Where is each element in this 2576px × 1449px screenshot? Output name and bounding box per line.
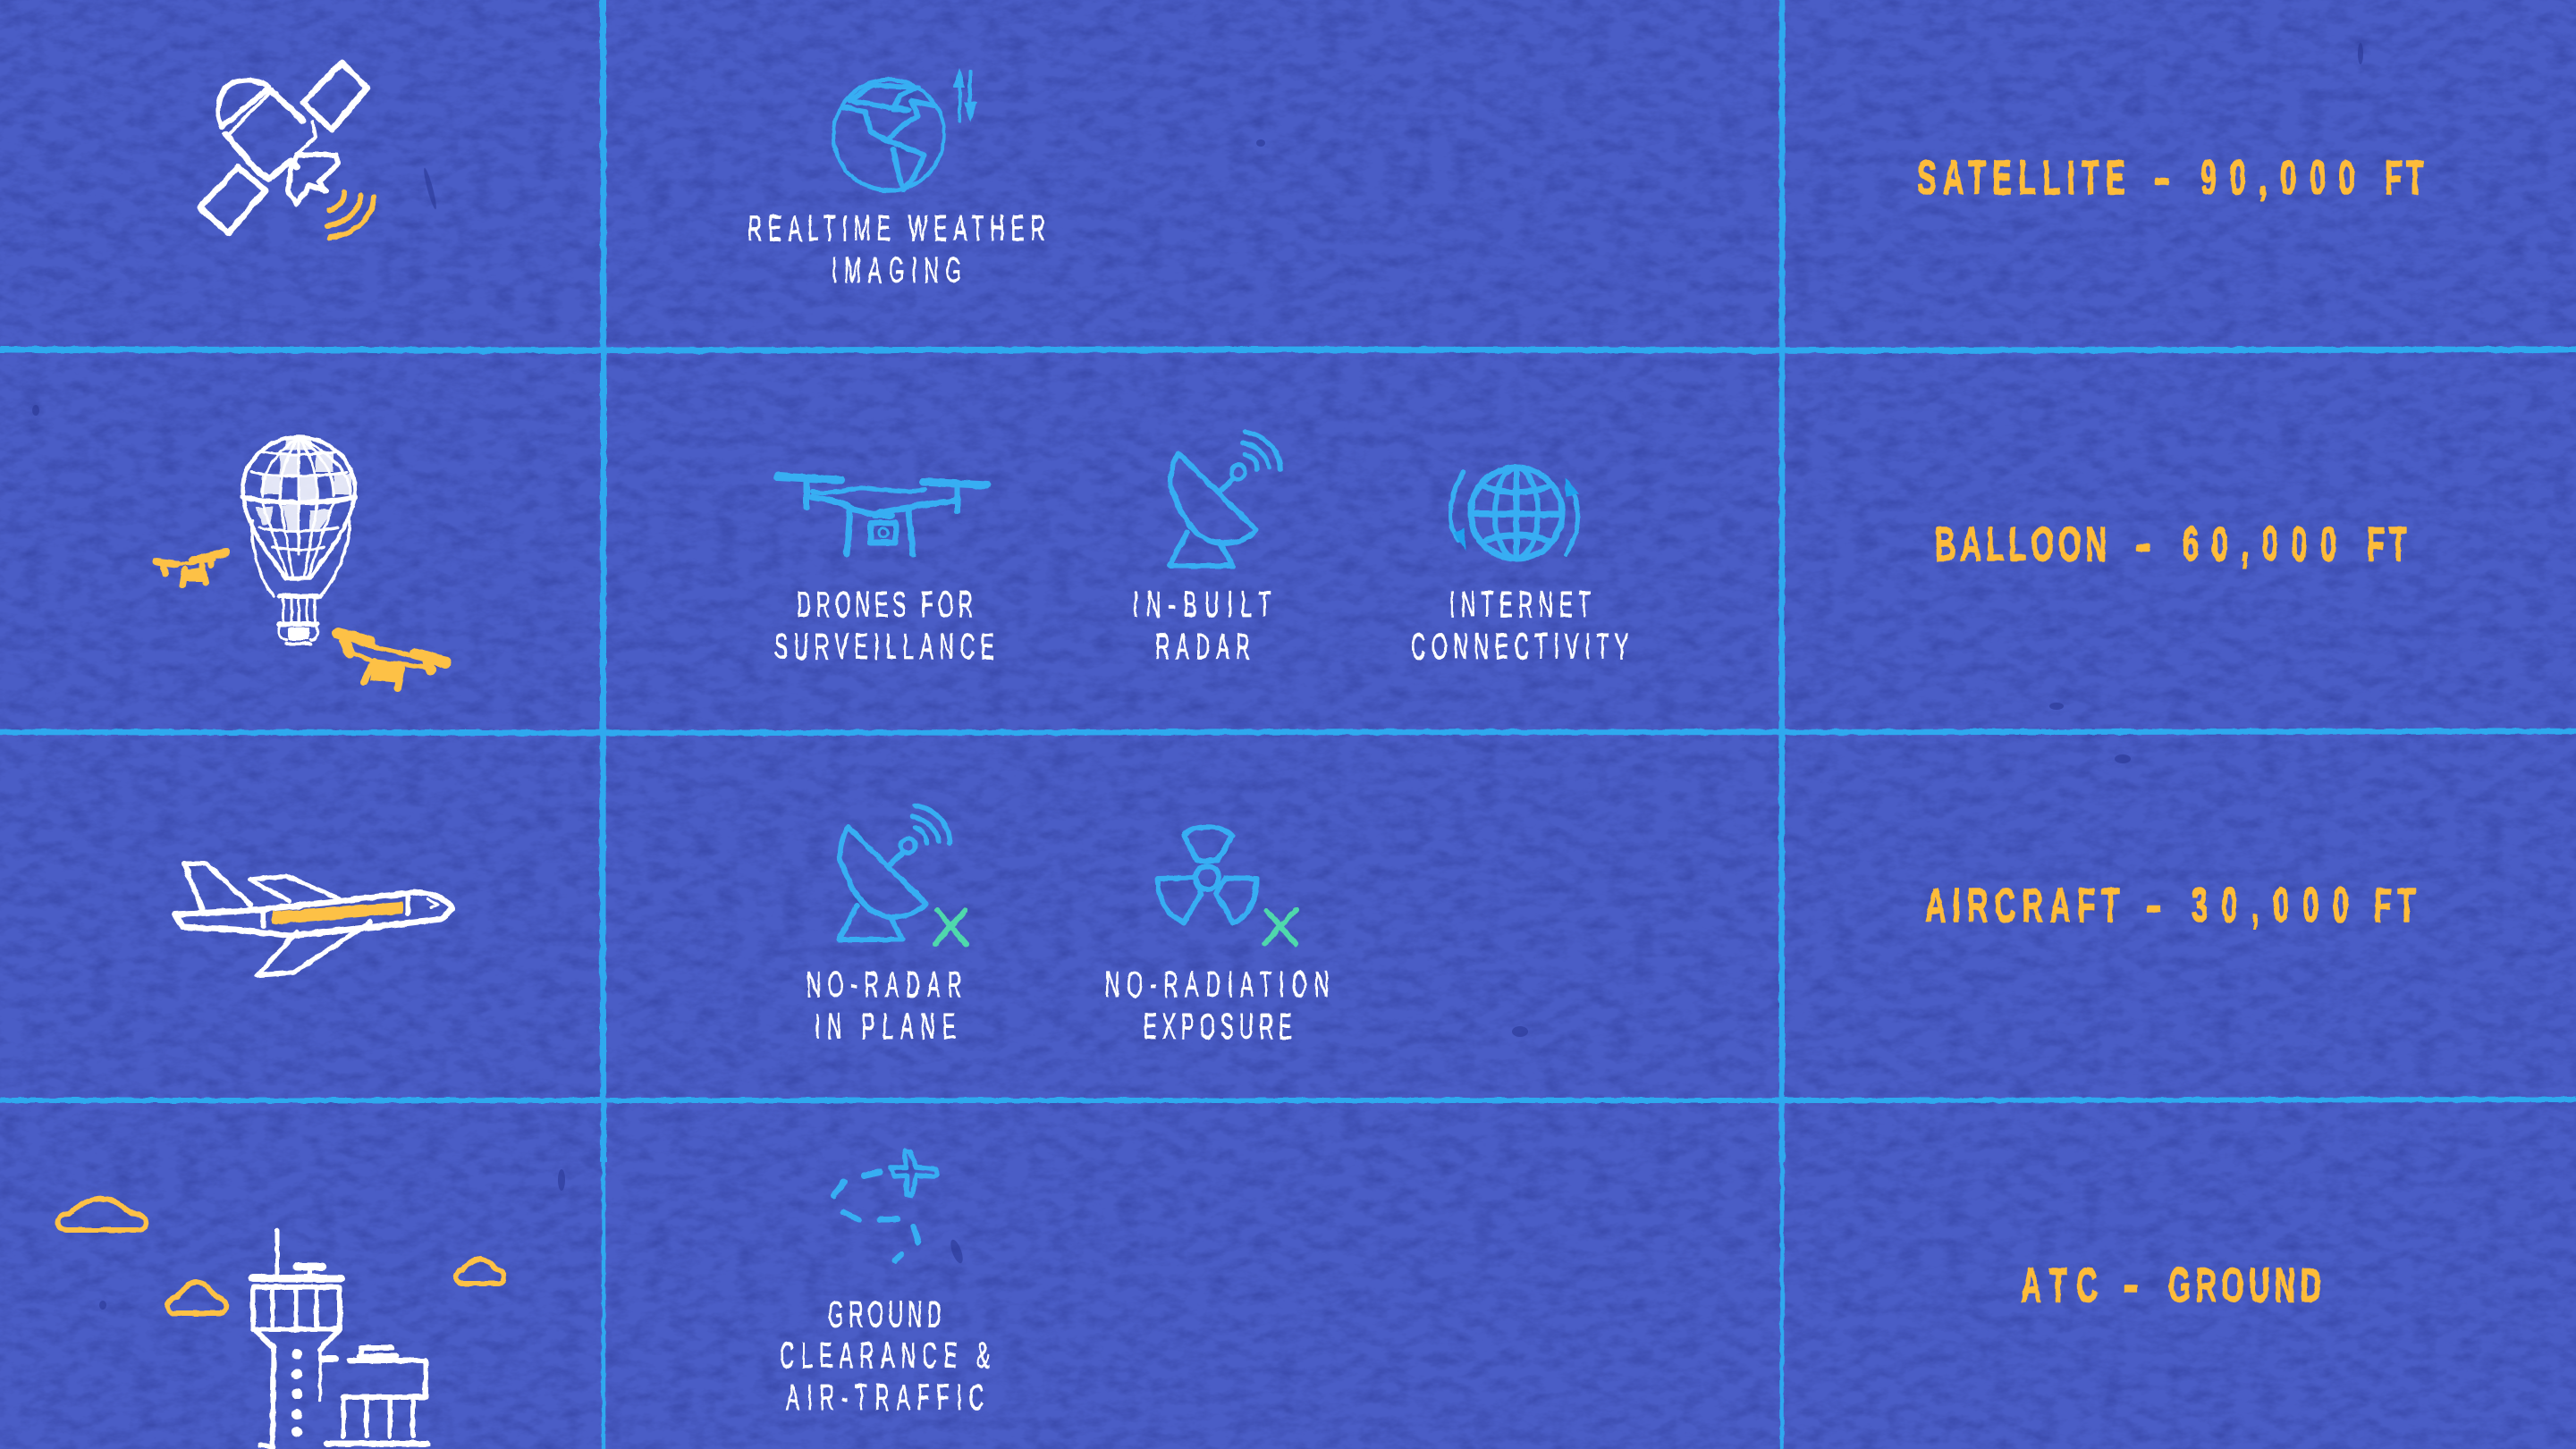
- icon: hot air balloon: [242, 437, 355, 644]
- altitude label: balloon: 60,000: [2183, 518, 2336, 571]
- icon: large cloud: [58, 1199, 146, 1230]
- altitude label: aircraft: -: [2146, 879, 2162, 932]
- row: aircraft: [0, 733, 2576, 1100]
- icon: blue drone: [778, 476, 987, 554]
- altitude label: satellite: -: [2154, 151, 2170, 205]
- icon: globe with rotation arrows: [1450, 468, 1579, 559]
- altitude label: balloon: -: [2135, 518, 2151, 571]
- feature label: in-built radar: RADAR: [1155, 627, 1250, 668]
- altitude label: satellite: 90,000: [2200, 152, 2355, 205]
- icon: large yellow drone: [338, 633, 445, 688]
- feature label: in-built radar: [1133, 585, 1271, 668]
- feature label: internet connectivity: [1411, 585, 1628, 668]
- altitude label: aircraft: 30,000: [2192, 880, 2349, 932]
- altitude label: satellite: [1917, 151, 2424, 205]
- feature label: in-built radar: IN-BUILT: [1133, 585, 1271, 626]
- feature label: internet connectivity: CONNECTIVITY: [1411, 627, 1628, 668]
- icon: satellite: [200, 63, 367, 233]
- altitude label: aircraft: [1925, 879, 2415, 932]
- row: atc ground: [0, 1101, 2576, 1449]
- feature label: ground clearance and air-traffic: [780, 1294, 990, 1419]
- altitude label: balloon: FT: [2367, 518, 2407, 571]
- icon: small cloud: [456, 1259, 504, 1284]
- feature label: no-radar in plane: [807, 965, 962, 1048]
- altitude label: aircraft: AIRCRAFT: [1925, 880, 2119, 932]
- feature label: drones for surveillance: [774, 585, 994, 668]
- icon: satellite signal waves: [327, 192, 374, 238]
- icon: airplane: [175, 864, 452, 975]
- feature label: no-radar in plane: IN PLANE: [815, 1007, 956, 1048]
- feature label: no-radiation exposure: NO-RADIATION: [1105, 965, 1329, 1006]
- feature label: realtime weather imaging: REALTIME WEATHER: [747, 208, 1045, 249]
- altitude label: balloon: [1935, 518, 2407, 571]
- feature label: no-radar in plane: NO-RADAR: [807, 965, 962, 1006]
- feature label: internet connectivity: INTERNET: [1449, 585, 1591, 626]
- feature label: ground clearance and air-traffic: GROUND: [828, 1294, 942, 1335]
- icon: control tower: [252, 1230, 427, 1446]
- altitude label: atc ground: GROUND: [2168, 1259, 2321, 1312]
- icon: middle cloud: [167, 1282, 226, 1313]
- feature label: realtime weather imaging: [747, 208, 1045, 291]
- feature label: ground clearance and air-traffic: AIR-TRAFFIC: [786, 1377, 984, 1419]
- altitude label: atc ground: ATC: [2021, 1259, 2098, 1312]
- feature label: realtime weather imaging: IMAGING: [832, 250, 961, 291]
- altitude label: satellite: SATELLITE: [1917, 152, 2125, 205]
- altitude label: balloon: BALLOON: [1935, 518, 2107, 571]
- feature label: drones for surveillance: DRONES FOR: [797, 585, 973, 626]
- icon: no radar: [839, 805, 966, 944]
- icon: earth with up and down arrows: [833, 68, 977, 190]
- row: satellite: [0, 0, 2576, 350]
- icon: radar dish: [1170, 432, 1280, 566]
- altitude label: atc ground: [2021, 1259, 2321, 1312]
- feature label: drones for surveillance: SURVEILLANCE: [774, 627, 994, 668]
- icon: small yellow drone: [156, 552, 226, 585]
- row: balloon: [0, 350, 2576, 732]
- icon: plane on dashed flight path: [833, 1150, 937, 1260]
- feature label: no-radiation exposure: [1105, 965, 1329, 1048]
- icon: no radiation: [1157, 827, 1296, 944]
- altitude label: atc ground: -: [2123, 1259, 2139, 1312]
- altitude label: satellite: FT: [2385, 152, 2424, 205]
- altitude label: aircraft: FT: [2374, 880, 2415, 932]
- feature label: ground clearance and air-traffic: CLEARANCE &: [780, 1335, 990, 1377]
- feature label: no-radiation exposure: EXPOSURE: [1144, 1007, 1292, 1048]
